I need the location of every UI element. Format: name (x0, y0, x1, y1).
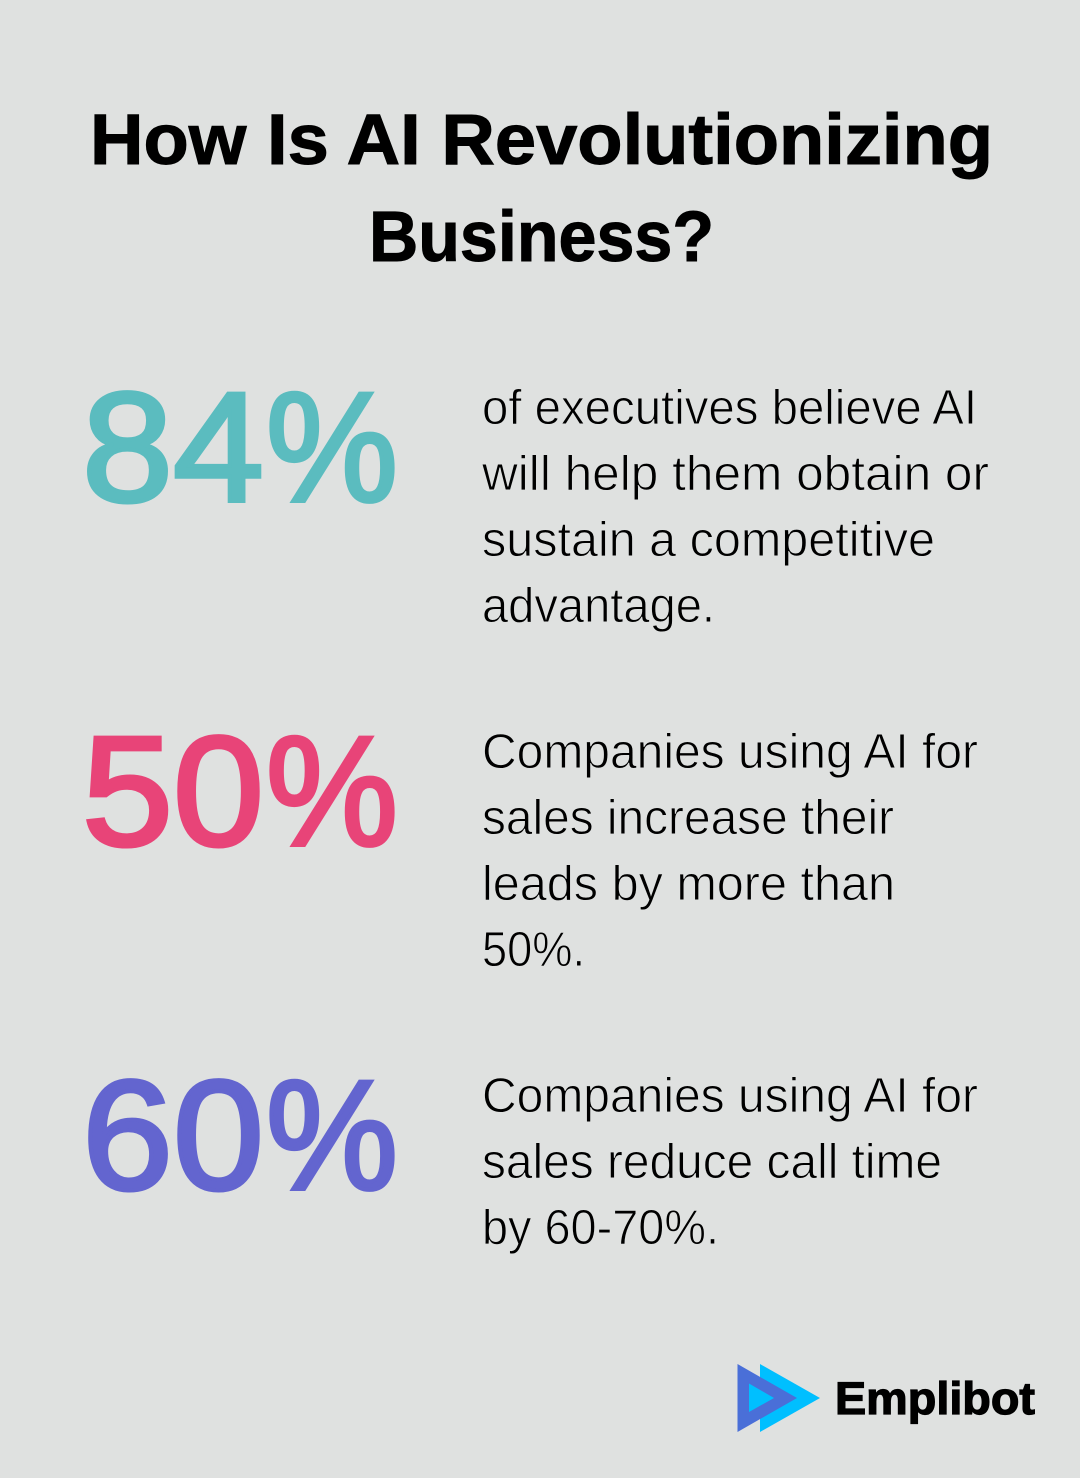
stat 2 description: sales increase their (482, 791, 894, 845)
stat 2 number: 50%: 50 (82, 705, 264, 879)
icon: play triangles (738, 1364, 820, 1432)
stat 3 number: 60%: 60 (82, 1049, 264, 1223)
stat 3 description: by 60-70%. (482, 1201, 719, 1255)
stat 1 number: 84%: 84 (82, 361, 264, 535)
stat 2 description: leads by more than (482, 857, 895, 911)
stat 3 number: 60%: % (266, 1049, 398, 1223)
stat 3 description (482, 1069, 978, 1255)
stat 2 description: Companies using AI for (482, 725, 978, 779)
title: Business? (369, 198, 714, 277)
stat 3 description: sales reduce call time (482, 1135, 942, 1189)
stat 1 number: 84%: % (266, 361, 398, 535)
stat 1 description: will help them obtain or (481, 447, 989, 501)
stat 1 description: advantage. (482, 579, 715, 633)
logo: Emplibot (738, 1364, 1035, 1432)
title: How Is AI Revolutionizing (90, 101, 993, 180)
stat 1 description: sustain a competitive (482, 513, 935, 567)
wordmark: Emplibot (835, 1373, 1035, 1424)
stat 2 description: 50%. (482, 923, 585, 977)
stat 1 description: of executives believe AI (482, 381, 977, 435)
stat 1 description (481, 381, 989, 633)
stat 3 description: Companies using AI for (482, 1069, 978, 1123)
stat 2 description (482, 725, 978, 977)
title (90, 101, 993, 277)
stat 2 number: 50%: % (266, 705, 398, 879)
